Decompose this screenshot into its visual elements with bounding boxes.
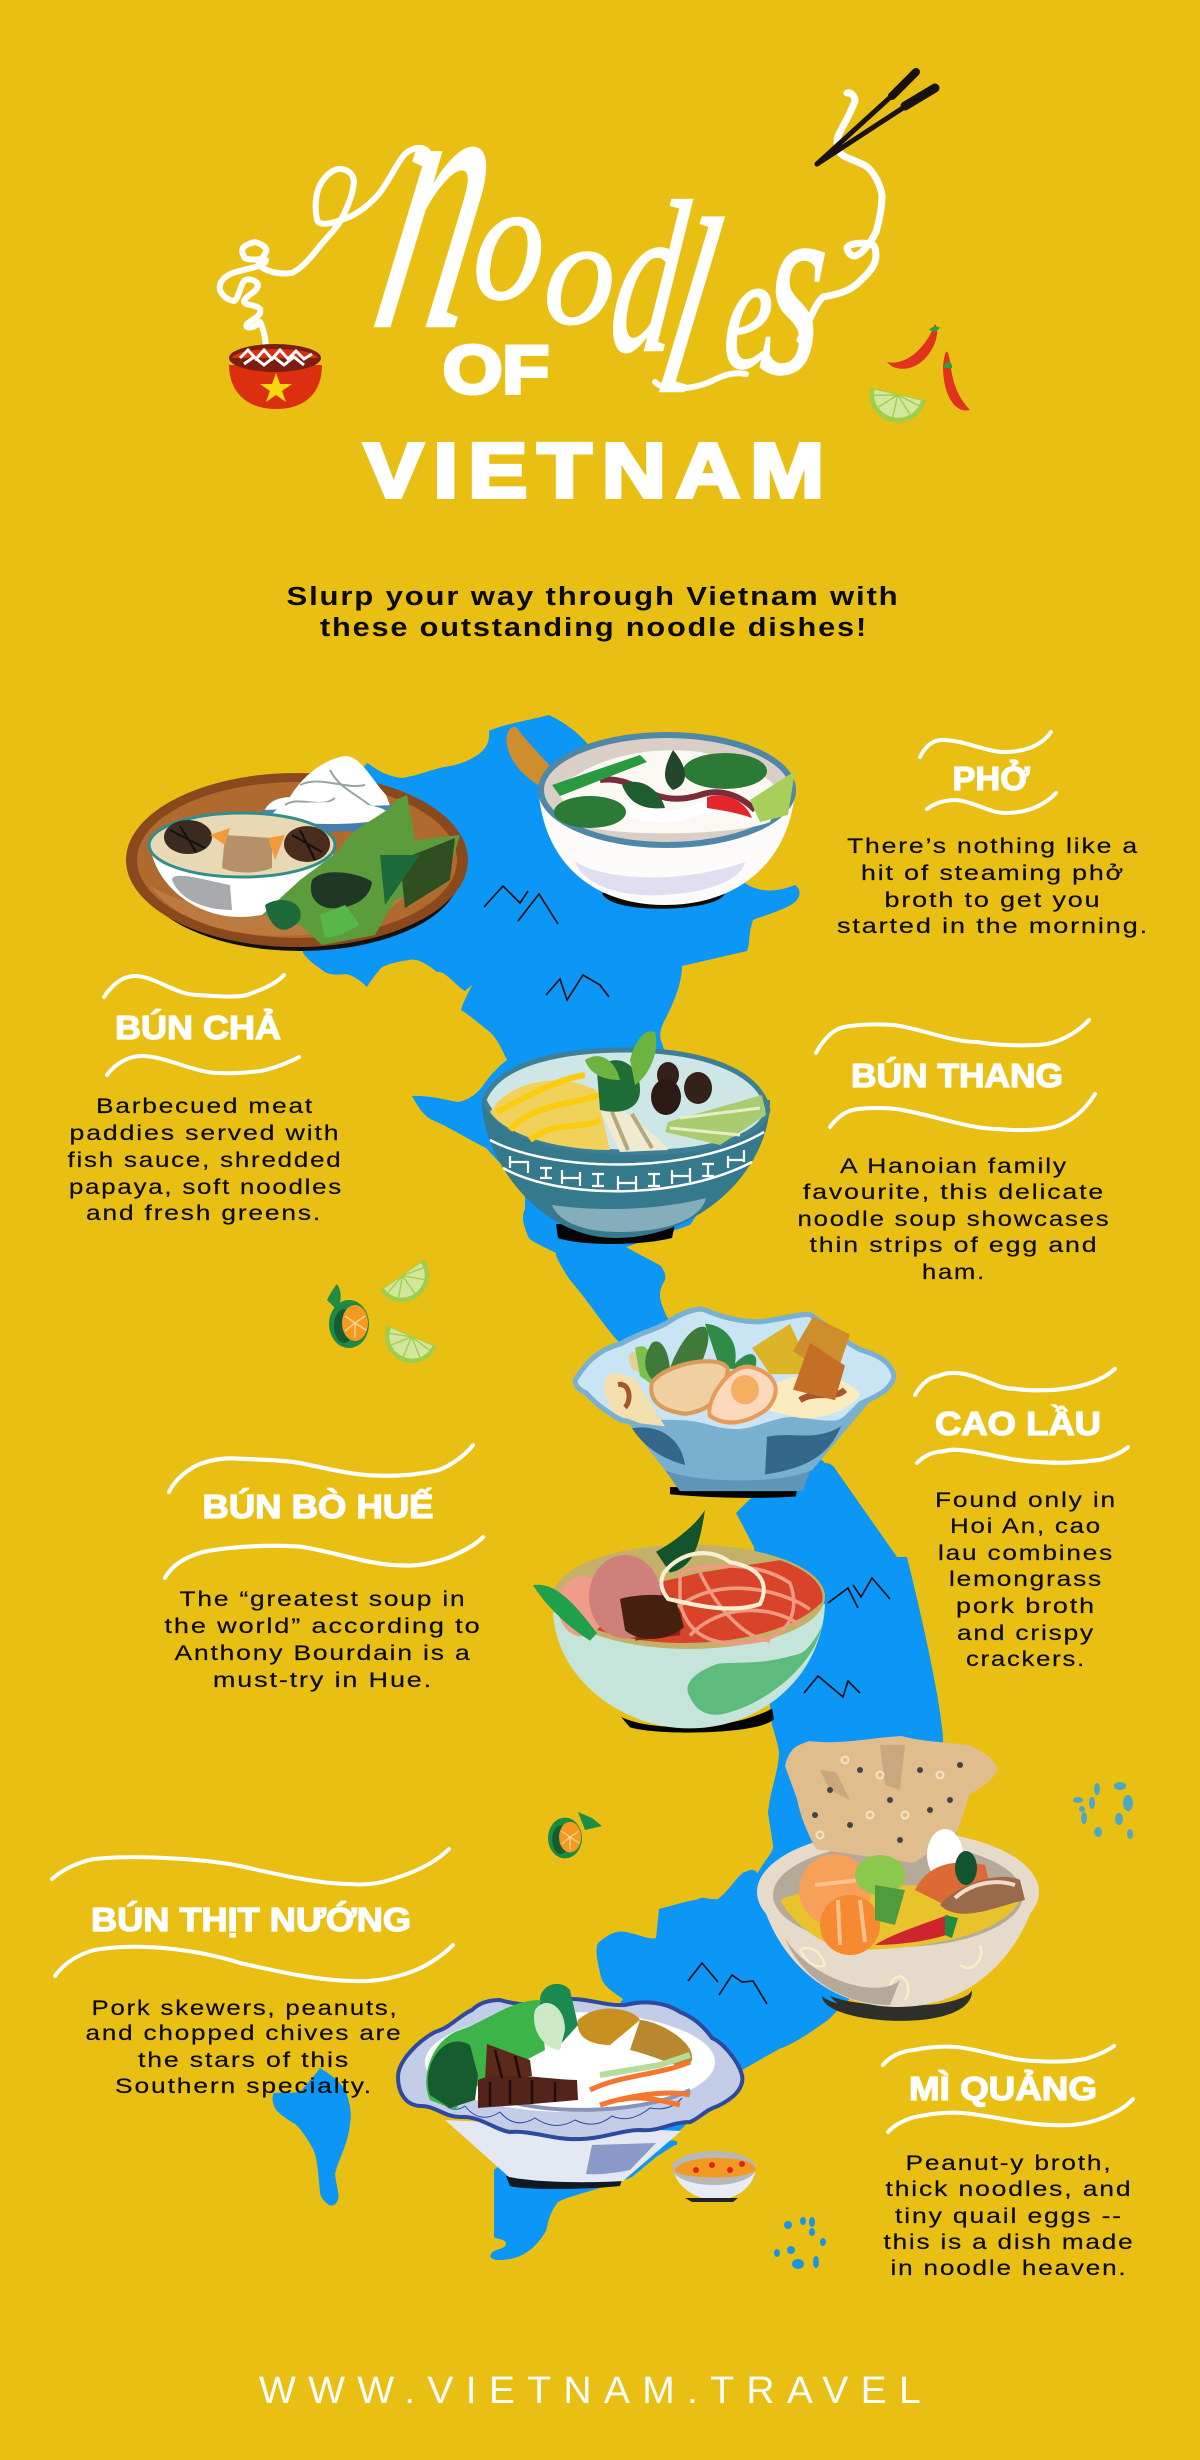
- bun thang description: noodle soup showcases: [798, 1207, 1110, 1231]
- script letters: o: [468, 146, 552, 335]
- pho description: started in the morning.: [837, 914, 1149, 938]
- mi quang description: in noodle heaven.: [890, 2256, 1128, 2280]
- bun thang description: thin strips of egg and: [810, 1233, 1098, 1257]
- icon: kumquat: [548, 1812, 602, 1858]
- cao lau description: lemongrass: [949, 1567, 1103, 1591]
- dish: bun thit nuong bowl: [398, 1984, 742, 2189]
- section: cao lau: [915, 1369, 1128, 1671]
- bun thit nuong description: the stars of this: [138, 2048, 350, 2072]
- cao lau description: and crispy: [957, 1621, 1095, 1645]
- section: bun thit nuong: [52, 1849, 453, 2098]
- cao lau toppings: [604, 1373, 665, 1426]
- bun cha description: paddies served with: [70, 1121, 340, 1145]
- cao lau description: lau combines: [938, 1541, 1114, 1565]
- bun cha description: Barbecued meat: [96, 1094, 314, 1118]
- pho toppings: [575, 802, 752, 820]
- icon: chilis and lime: [864, 324, 970, 428]
- bun bo hue description: the world” according to: [164, 1614, 482, 1638]
- dish: bun cha plate: [126, 756, 468, 951]
- script letters: s: [752, 141, 841, 429]
- mi quang description: [884, 2151, 1134, 2280]
- dish: bun bo hue bowl: [533, 1510, 825, 1733]
- mi quang toppings: [780, 1885, 1020, 1950]
- bun thang description: A Hanoian family: [840, 1154, 1068, 1178]
- section: bun bo hue: BÚN BÒ HUẾ: [202, 1488, 434, 1525]
- section: bun thang: [798, 1020, 1110, 1284]
- pho description: [837, 834, 1149, 938]
- subtitle: [286, 583, 900, 642]
- pho description: hit of steaming phở: [861, 861, 1125, 885]
- bun thang description: ham.: [922, 1260, 986, 1284]
- section: bun cha: [68, 975, 343, 1225]
- bun thit nuong description: [86, 1996, 402, 2098]
- icon: red noodle bowl: [229, 344, 322, 409]
- bun bo toppings: [680, 1566, 794, 1643]
- dish: bun thang bowl: [482, 1031, 770, 1244]
- cao lau description: pork broth: [956, 1594, 1096, 1618]
- mountains: [484, 886, 890, 2004]
- section: mi quang: MÌ QUẢNG: [909, 2070, 1097, 2107]
- script letters: d: [599, 158, 699, 397]
- bun cha description: papaya, soft noodles: [69, 1175, 343, 1199]
- script letters: l: [641, 170, 737, 446]
- bun thit nuong toppings: [426, 2000, 545, 2110]
- noodle strand joining letters: [655, 373, 746, 388]
- bun thang description: [798, 1154, 1110, 1284]
- dish: pho bowl: [507, 727, 795, 909]
- cracker: [785, 1736, 998, 1863]
- script letters: n: [351, 0, 535, 408]
- noodle strand from bowl: [220, 148, 434, 352]
- title: [220, 0, 882, 514]
- icon: blue specks: [1073, 1782, 1133, 1839]
- bun cha description: [68, 1094, 343, 1225]
- bun bo hue description: Anthony Bourdain is a: [174, 1641, 472, 1665]
- cao lau description: [935, 1488, 1117, 1671]
- bun thit nuong description: Pork skewers, peanuts,: [92, 1996, 398, 2020]
- section: bun thit nuong: BÚN THỊT NƯỚNG: [91, 1901, 411, 1938]
- section: cao lau: CAO LẦU: [935, 1405, 1101, 1442]
- dish: cao lau bowl: [575, 1309, 894, 1498]
- icon: blue specks lower: [774, 2217, 826, 2269]
- mi quang description: this is a dish made: [884, 2230, 1134, 2254]
- bun bo hue description: [164, 1587, 482, 1692]
- bread stick: [507, 727, 572, 796]
- icon: dipping sauce: [672, 2151, 756, 2202]
- bun thit nuong description: and chopped chives are: [86, 2021, 402, 2045]
- bun thit nuong description: Southern specialty.: [115, 2074, 373, 2098]
- noodle strand to chopsticks: [800, 93, 882, 340]
- subtitle: these outstanding noodle dishes!: [320, 614, 868, 642]
- script letters: e: [720, 221, 779, 403]
- yellow egg strips: [490, 1081, 610, 1150]
- bun bo hue description: The “greatest soup in: [180, 1587, 466, 1611]
- section: bun thang: BÚN THANG: [851, 1057, 1063, 1094]
- section: bun cha: BÚN CHẢ: [115, 1009, 281, 1046]
- mi quang description: Peanut-y broth,: [906, 2151, 1112, 2175]
- VIETNAM: VIETNAM: [364, 427, 824, 514]
- icon: kumquat and limes: [327, 1260, 440, 1371]
- mainland: [300, 715, 960, 2260]
- mi quang description: thick noodles, and: [886, 2177, 1132, 2201]
- section: pho: PHỞ: [952, 760, 1030, 797]
- bun cha description: fish sauce, shredded: [68, 1148, 342, 1172]
- script letters: o: [540, 191, 621, 356]
- cao lau description: crackers.: [966, 1647, 1086, 1671]
- small dipping bowl: [150, 845, 335, 917]
- pho description: There’s nothing like a: [847, 834, 1139, 858]
- island: [272, 2068, 351, 2205]
- section: mi quang: [883, 2046, 1134, 2280]
- bun thang description: favourite, this delicate: [803, 1180, 1105, 1204]
- greens: [262, 795, 460, 945]
- section: pho: [837, 732, 1149, 938]
- pho description: broth to get you: [884, 888, 1102, 912]
- OF: OF: [443, 332, 549, 408]
- cao lau description: Hoi An, cao: [950, 1514, 1102, 1538]
- footer url: WWW.VIETNAM.TRAVEL: [259, 2370, 933, 2412]
- section: bun bo hue: [164, 1445, 483, 1692]
- bun cha description: and fresh greens.: [86, 1201, 322, 1225]
- script letters: [351, 0, 841, 446]
- cao lau description: Found only in: [935, 1488, 1117, 1512]
- mi quang description: tiny quail eggs --: [895, 2204, 1123, 2228]
- subtitle: Slurp your way through Vietnam with: [286, 583, 900, 611]
- map of Vietnam: [272, 715, 960, 2260]
- bun bo hue description: must-try in Hue.: [213, 1668, 433, 1692]
- icon: chopsticks: [817, 72, 935, 164]
- dish: mi quang bowl: [757, 1736, 1039, 2021]
